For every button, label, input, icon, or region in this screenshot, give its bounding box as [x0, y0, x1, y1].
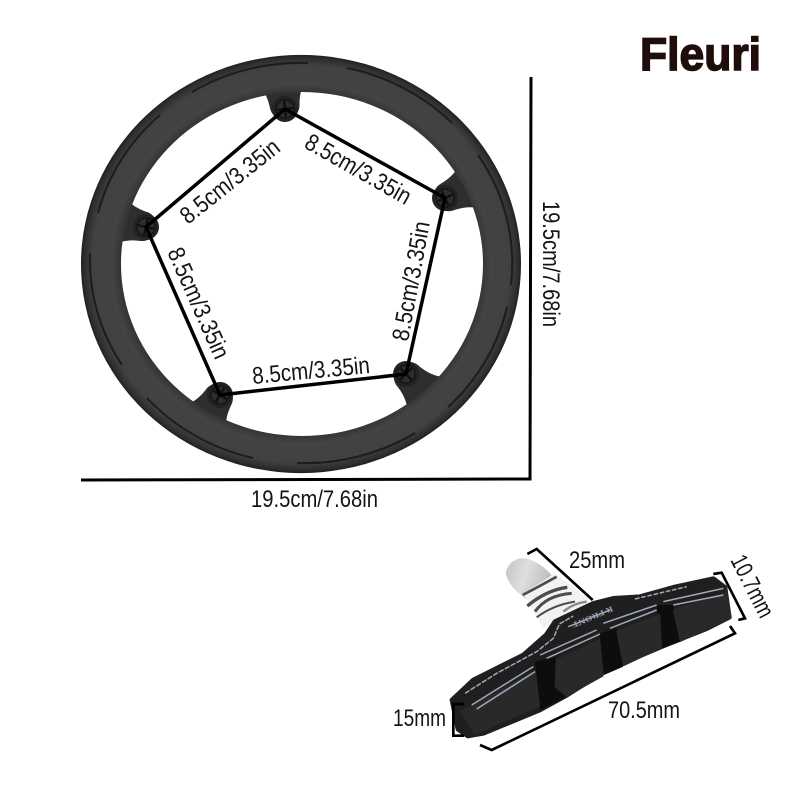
label: 70.5mm: 70.5mm	[608, 697, 680, 724]
stud cap	[506, 558, 552, 600]
pentagon label: lower left: 8.5cm/3.35in	[162, 243, 235, 363]
ring slots	[90, 63, 512, 463]
pentagon label: right: 8.5cm/3.35in	[387, 219, 436, 343]
stud spring base	[523, 573, 588, 628]
mounting lug: right	[428, 181, 462, 215]
mounting lug: left	[130, 211, 162, 243]
outer ring	[81, 55, 521, 473]
brake pad	[452, 558, 731, 736]
pentagon label: upper left: 8.5cm/3.35in	[175, 134, 286, 230]
spring coils	[523, 577, 587, 617]
label: 25mm: 25mm	[569, 547, 625, 574]
brake pad dimension brackets	[453, 549, 745, 750]
threaded stud	[506, 558, 588, 628]
label: 10.7mm: 10.7mm	[725, 550, 779, 622]
overall height and width dimension lines	[81, 77, 531, 480]
lug flares	[106, 72, 488, 440]
mounting lug: lower right	[388, 356, 424, 392]
pad marking: R FRONT	[570, 604, 614, 630]
mounting lug: lower left	[202, 377, 238, 413]
chainring guard	[81, 55, 521, 473]
overall height label: 19.5cm/7.68in	[537, 201, 564, 327]
pentagon label: upper right: 8.5cm/3.35in	[300, 129, 416, 211]
pad grooves	[535, 605, 681, 710]
label: 15mm: 15mm	[393, 705, 446, 732]
mounting lug: top	[271, 95, 299, 123]
overall width label: 19.5cm/7.68in	[251, 486, 378, 513]
pad decorative lines	[465, 587, 723, 709]
pad friction blocks	[462, 593, 731, 734]
brand logo: Fleuri: Fleuri	[640, 28, 761, 80]
pad body	[452, 579, 729, 736]
bolt circle pentagon measurement lines	[146, 109, 445, 395]
pentagon label: bottom: 8.5cm/3.35in	[251, 352, 371, 390]
